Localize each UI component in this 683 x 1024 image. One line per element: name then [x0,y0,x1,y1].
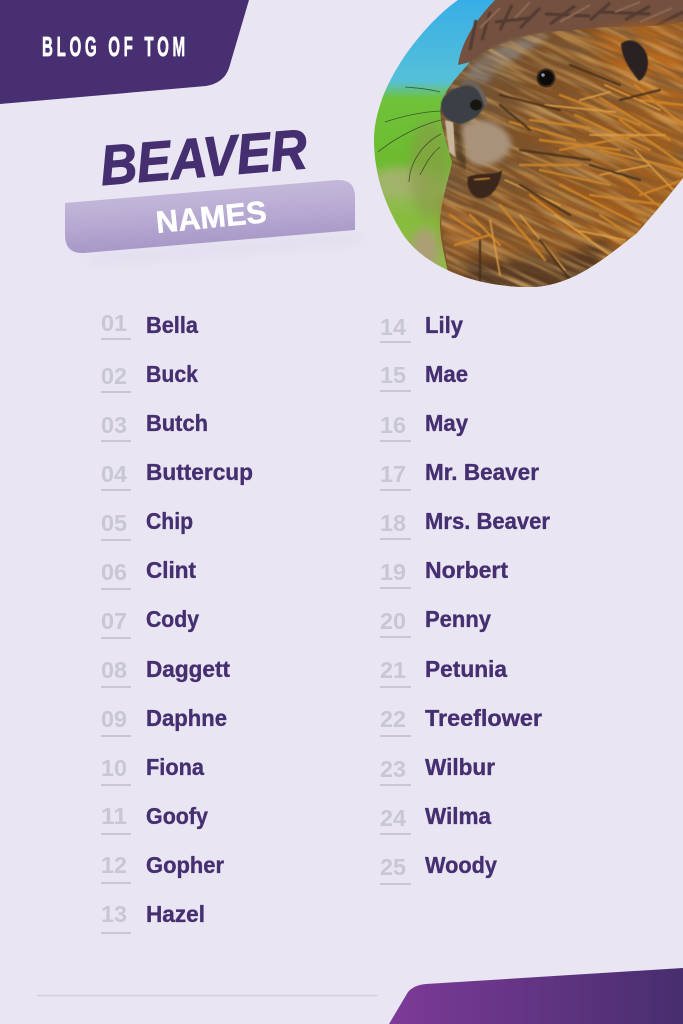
row 09 Daphne: 09 [101,706,127,732]
upper-right orange fur [590,24,683,130]
photo: beaver close-up in organic blob [374,0,683,287]
row 20 Penny: Penny [425,606,491,632]
names list: column one [101,310,253,933]
row 24 Wilma [380,803,491,834]
row 06 Clint [101,557,196,589]
row 16 May: 16 [380,412,406,438]
header banner with brand [0,0,249,104]
subtitle text: NAMES [154,194,268,240]
row 20 Penny: 20 [380,608,406,634]
row 25 Woody: 25 [380,854,406,880]
row 15 Mae: Mae [425,361,468,387]
row 18 Mrs. Beaver: Mrs. Beaver [425,508,550,534]
row 10 Fiona: Fiona [146,754,204,780]
row 05 Chip [101,508,193,540]
row 24 Wilma: Wilma [425,803,491,829]
row 02 Buck: Buck [146,361,198,387]
row 15 Mae: 15 [380,362,406,388]
row 02 Buck [101,361,198,392]
back fur [458,0,683,65]
row 08 Daggett: 08 [101,657,127,683]
row 14 Lily [380,312,463,342]
names list: column two [380,312,550,884]
row 18 Mrs. Beaver [380,508,550,539]
row 10 Fiona [101,754,204,785]
fur texture [440,22,683,287]
row 22 Treeflower: 22 [380,706,406,732]
row 23 Wilbur [380,754,495,785]
eye [536,68,556,88]
row 02 Buck: 02 [101,363,127,389]
row 08 Daggett [101,656,230,687]
row 11 Goofy: Goofy [146,803,208,829]
row 17 Mr. Beaver [380,459,539,490]
row 19 Norbert [380,557,508,588]
ear [621,40,648,81]
row 12 Gopher: 12 [101,852,127,878]
subtitle banner: Names [65,180,362,264]
title: Beaver: BEAVER [98,117,310,197]
row 25 Woody [380,852,497,884]
row 19 Norbert: 19 [380,559,406,585]
footer corner shape [389,968,683,1024]
row 21 Petunia [380,656,507,687]
row 17 Mr. Beaver: 17 [380,461,406,487]
row 07 Cody: 07 [101,608,127,634]
row 03 Butch: 03 [101,412,127,438]
lower dark body shading [461,236,612,287]
row 03 Butch [101,410,208,441]
orange fur strands [450,65,683,285]
whiskers [378,87,441,182]
row 22 Treeflower [380,705,542,736]
body and head [440,22,683,300]
row 14 Lily: 14 [380,314,406,340]
row 05 Chip: 05 [101,510,127,536]
row 13 Hazel: 13 [101,901,127,927]
row 16 May: May [425,410,468,436]
row 17 Mr. Beaver: Mr. Beaver [425,459,539,485]
row 20 Penny [380,606,491,637]
row 01 Bella: 01 [101,310,127,336]
brand text: Blog of Tom: BLOG OF TOM [42,31,185,62]
row 19 Norbert: Norbert [425,557,508,583]
muzzle [461,120,512,166]
row 21 Petunia: Petunia [425,656,507,682]
row 06 Clint: 06 [101,559,127,585]
row 13 Hazel: Hazel [146,901,205,927]
row 13 Hazel [101,901,205,933]
row 10 Fiona: 10 [101,755,127,781]
row 14 Lily: Lily [425,312,463,338]
row 24 Wilma: 24 [380,805,406,831]
forehead grey highlight [464,34,552,84]
row 15 Mae [380,361,468,391]
row 04 Buttercup: 04 [101,461,127,487]
row 08 Daggett: Daggett [146,656,230,682]
row 07 Cody [101,606,199,638]
row 12 Gopher: Gopher [146,852,224,878]
mouth [467,170,502,198]
nose [441,82,486,124]
row 04 Buttercup: Buttercup [146,459,253,485]
row 18 Mrs. Beaver: 18 [380,510,406,536]
row 11 Goofy: 11 [101,803,127,829]
row 05 Chip: Chip [146,508,193,534]
row 01 Bella: Bella [146,312,198,338]
row 03 Butch: Butch [146,410,208,436]
row 09 Daphne [101,705,227,736]
row 25 Woody: Woody [425,852,497,878]
row 12 Gopher [101,852,224,883]
lower-left orange fur [442,200,480,253]
row 09 Daphne: Daphne [146,705,227,731]
row 23 Wilbur: Wilbur [425,754,495,780]
row 23 Wilbur: 23 [380,756,406,782]
row 21 Petunia: 21 [380,657,406,683]
row 22 Treeflower: Treeflower [425,705,542,731]
row 01 Bella [101,310,198,339]
row 11 Goofy [101,803,208,834]
row 04 Buttercup [101,459,253,490]
row 07 Cody: Cody [146,606,199,632]
row 06 Clint: Clint [146,557,196,583]
row 16 May [380,410,468,441]
